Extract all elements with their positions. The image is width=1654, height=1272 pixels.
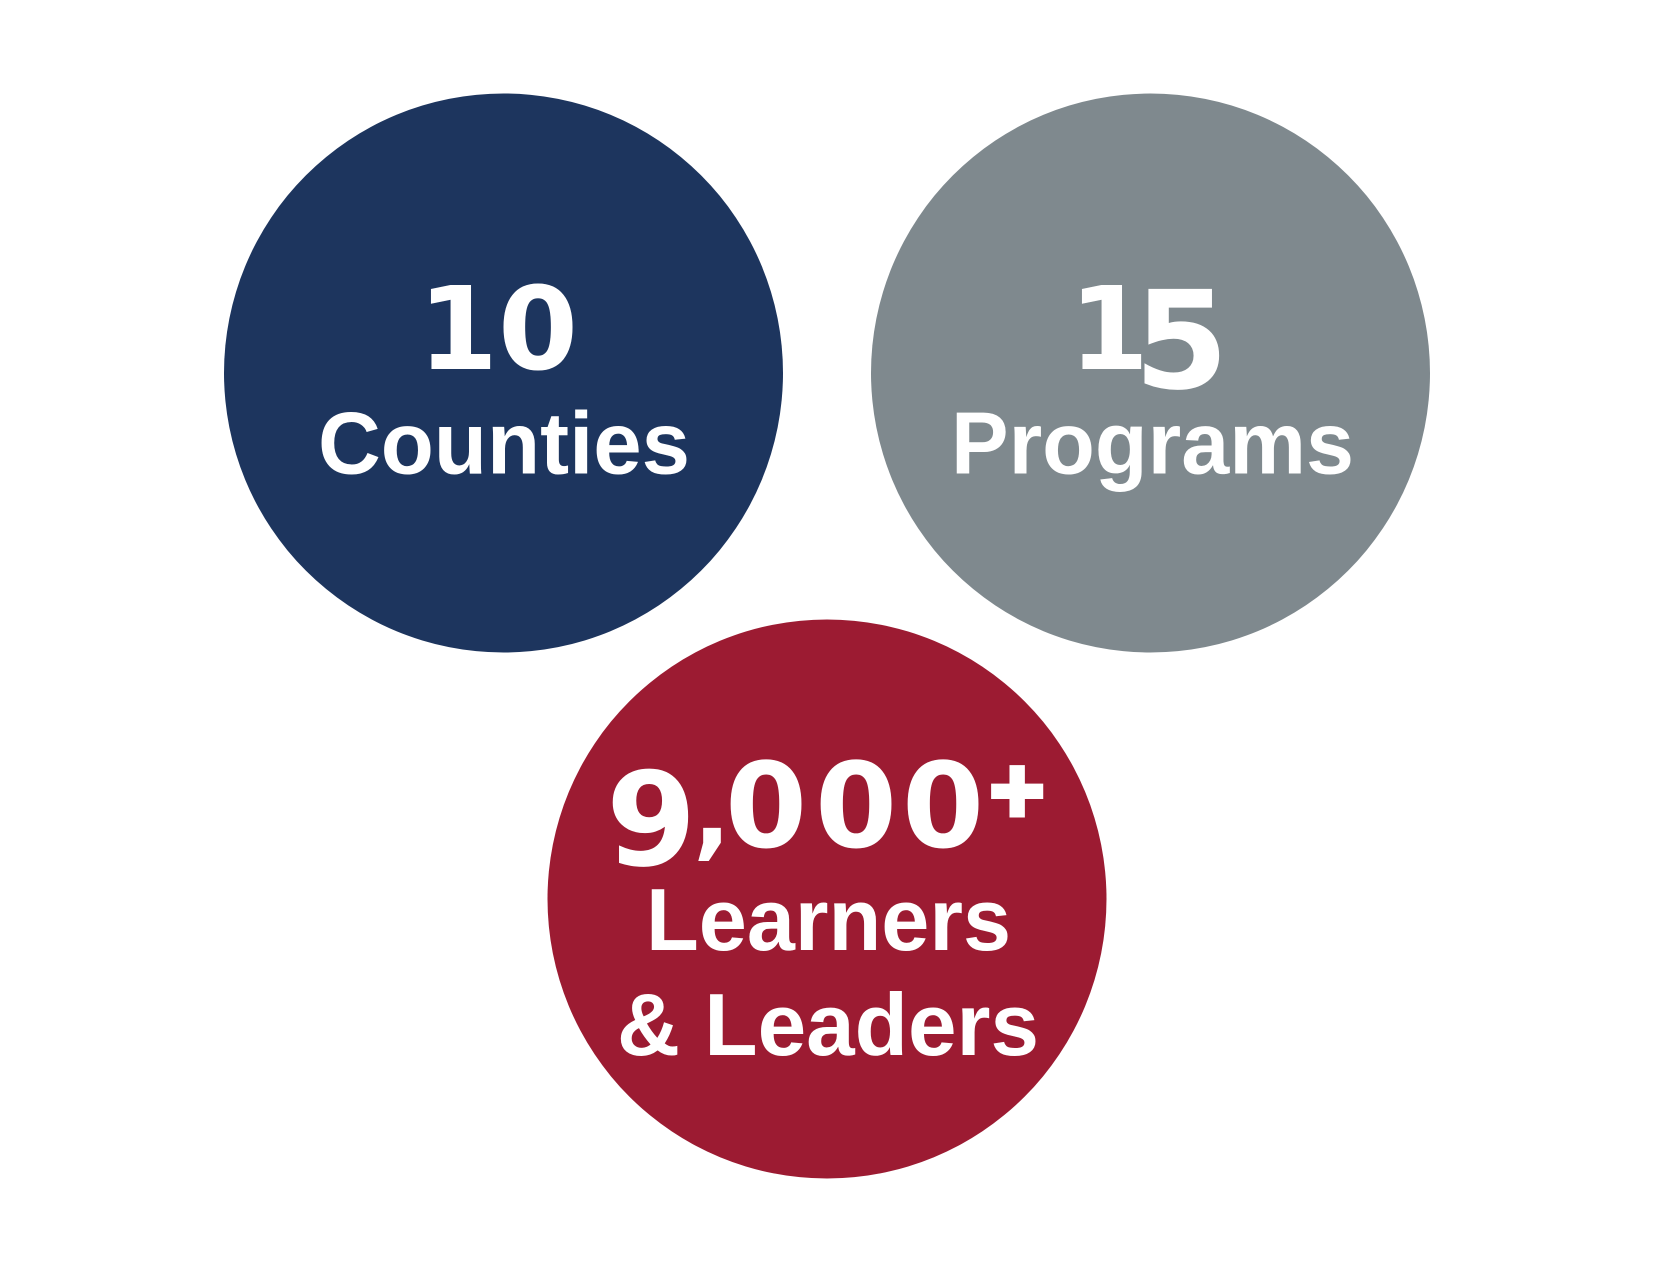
label: Learners: Learners [646,870,1011,969]
label: Counties: Counties [318,394,690,492]
number: 9,000+: 0 [725,737,807,875]
number: 9,000+: 9 [606,744,696,896]
number: 9,000+: 0 [902,737,984,875]
number: 9,000+: , [693,754,731,871]
number: 15: 1 [1069,263,1149,397]
panel: counties circle [224,94,783,652]
number: 15: 5 [1134,263,1229,421]
number: 10: 10 [418,263,578,397]
label: Programs: Programs [951,394,1354,492]
panel: programs circle [871,94,1430,652]
label: and Leaders: & Leaders [617,975,1039,1074]
number: 9,000+: 0 [815,737,897,875]
number: 9,000+: + [987,747,1047,831]
panel: learners and leaders circle [548,620,1106,1178]
